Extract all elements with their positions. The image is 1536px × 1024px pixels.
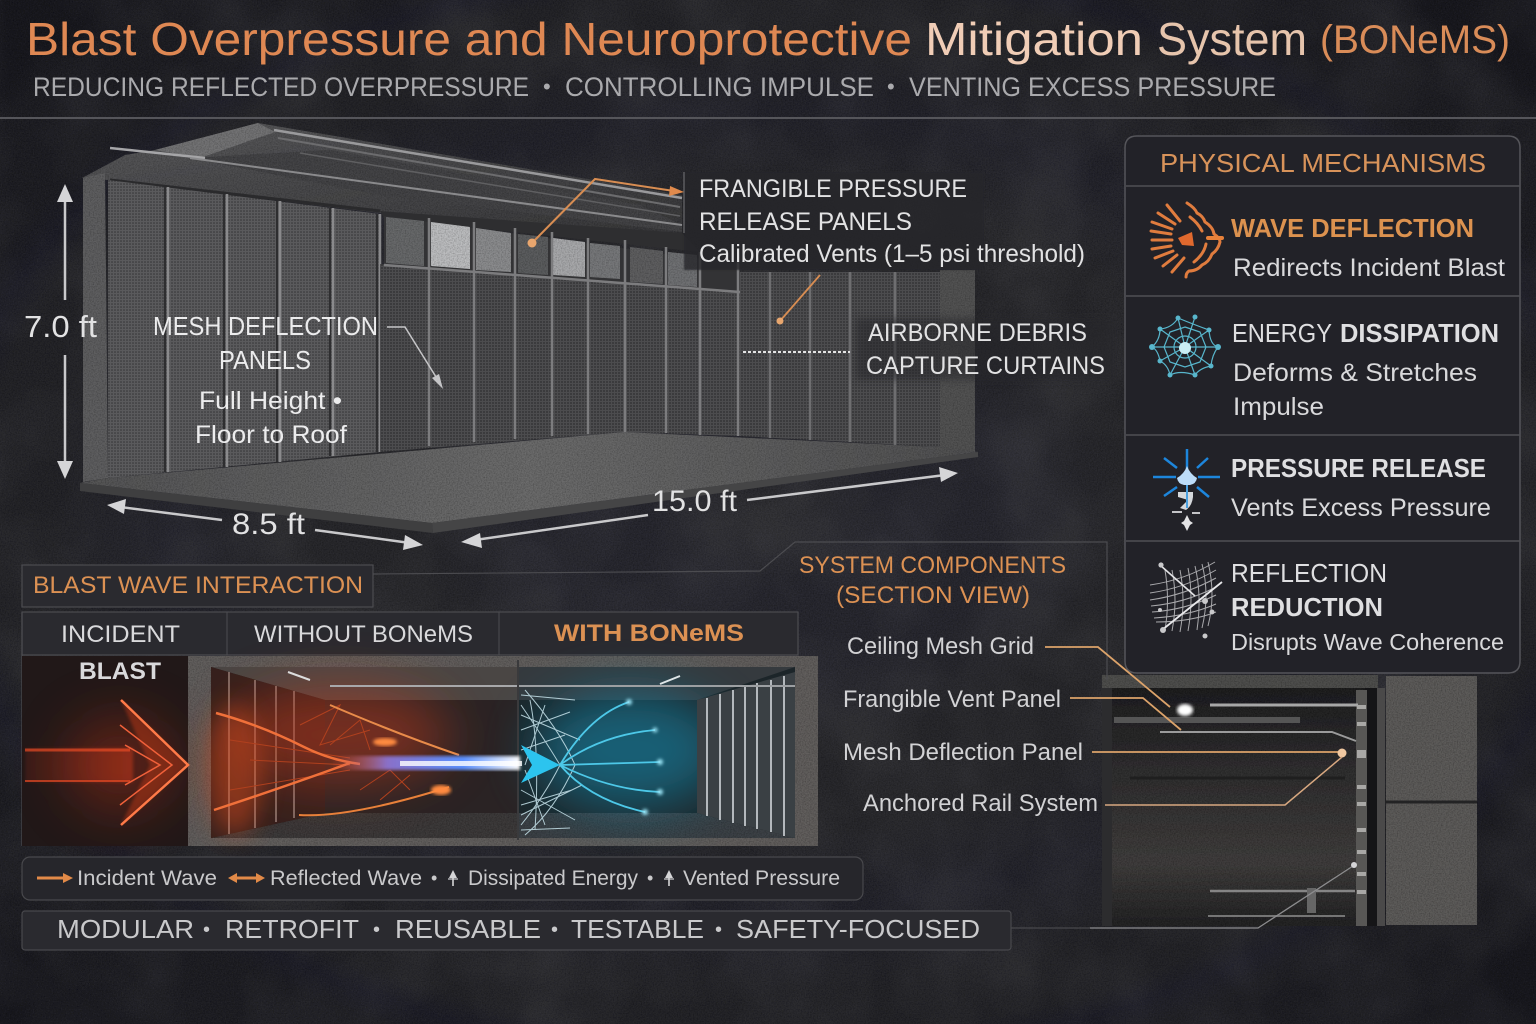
room: ceiling <box>82 123 700 252</box>
features strip: RETROFIT <box>225 914 359 944</box>
component labels and leaders <box>843 633 1346 817</box>
features strip <box>22 911 1011 950</box>
wave deflection text <box>1231 213 1505 282</box>
width dimension 8.5 ft <box>107 499 423 550</box>
features strip: • <box>373 919 380 941</box>
callout: mesh deflection panels: PANELS <box>219 345 311 375</box>
callout: frangible pressure release panels: Calibrated Vents (1–5 psi threshold) <box>699 240 1085 268</box>
incident blast column <box>22 656 188 846</box>
system components heading: SYSTEM COMPONENTS <box>799 552 1066 579</box>
incident blast column: BLAST <box>79 658 161 685</box>
features strip: REUSABLE <box>395 914 541 944</box>
icon: incident blast arrow <box>25 700 188 825</box>
legend: • <box>647 868 653 888</box>
features strip: • <box>203 919 210 941</box>
label: anchored rail system: Anchored Rail System <box>863 790 1098 817</box>
system components heading: (SECTION VIEW) <box>836 582 1030 609</box>
blast visual <box>188 656 818 846</box>
title <box>26 13 1510 65</box>
legend: Reflected Wave <box>270 867 422 890</box>
callout: airborne debris capture curtains <box>743 275 1105 380</box>
room with BONeMS <box>518 667 795 838</box>
features strip: SAFETY-FOCUSED <box>736 914 980 944</box>
icon: reflection reduction mesh <box>1150 562 1222 638</box>
subtitle: REDUCING REFLECTED OVERPRESSURE <box>33 72 529 102</box>
pressure release text: Vents Excess Pressure <box>1231 494 1491 522</box>
anchored rail <box>1356 690 1367 926</box>
room: floor slab <box>80 432 978 533</box>
title: (BONeMS) <box>1320 18 1510 62</box>
pressure release text: PRESSURE RELEASE <box>1231 453 1486 483</box>
features strip: MODULAR <box>57 914 194 944</box>
energy dissipation text: Impulse <box>1233 393 1324 421</box>
label: ceiling mesh grid: Ceiling Mesh Grid <box>847 633 1034 660</box>
subtitle: • <box>543 74 551 99</box>
concrete frame <box>188 656 818 846</box>
system components heading <box>799 552 1066 609</box>
pressure release text <box>1231 453 1491 522</box>
legend: Dissipated Energy <box>468 867 638 890</box>
callout: frangible pressure release panels: RELEASE PANELS <box>699 208 912 236</box>
panel: blast wave interaction <box>22 565 818 846</box>
room without BONeMS <box>207 667 518 838</box>
legend <box>22 857 863 900</box>
label: ceiling mesh grid <box>847 633 1170 707</box>
length dimension 15.0 ft <box>461 467 958 548</box>
heading: blast wave interaction: BLAST WAVE INTERACTION <box>33 572 363 599</box>
subtitle: • <box>887 74 895 99</box>
energy dissipation text: Deforms & Stretches <box>1233 359 1477 387</box>
features strip: • <box>551 919 558 941</box>
label: mesh deflection panel <box>843 739 1346 766</box>
heading: physical mechanisms: PHYSICAL MECHANISMS <box>1160 148 1486 178</box>
icon: reflected wave arrow <box>228 873 265 883</box>
table header: INCIDENT <box>61 621 180 648</box>
wave deflection text: Redirects Incident Blast <box>1233 254 1505 282</box>
concrete wall <box>1377 676 1477 926</box>
height dimension 7.0 ft: 7.0 ft <box>24 309 97 344</box>
callout: frangible pressure release panels: FRANGIBLE PRESSURE <box>699 175 967 203</box>
width dimension 8.5 ft: 8.5 ft <box>232 508 306 541</box>
horizontal rails <box>1114 705 1358 916</box>
reflection reduction text: REFLECTION <box>1231 558 1387 588</box>
panel: physical mechanisms <box>1125 136 1520 673</box>
energy dissipation text: ENERGY <box>1232 318 1332 348</box>
features strip: • <box>715 919 722 941</box>
icon: incident wave arrow <box>37 873 73 883</box>
legend: Incident Wave <box>77 867 217 890</box>
table header: WITHOUT BONeMS <box>254 621 473 648</box>
reflection reduction text <box>1231 558 1504 655</box>
room: corner post <box>83 173 108 482</box>
legend: Vented Pressure <box>683 867 840 890</box>
icon: pressure release <box>1153 449 1220 531</box>
legend: • <box>431 868 437 888</box>
reflection reduction text: REDUCTION <box>1231 592 1383 622</box>
wave deflection text: WAVE DEFLECTION <box>1231 213 1474 243</box>
callout: mesh deflection panels: Full Height • <box>199 387 342 415</box>
icon: energy dissipation web <box>1149 314 1221 378</box>
title: System <box>1157 13 1307 65</box>
label: frangible vent panel: Frangible Vent Panel <box>843 686 1061 713</box>
table header: WITH BONeMS <box>554 620 744 647</box>
icon: vented pressure <box>664 870 674 886</box>
height dimension 7.0 ft <box>24 184 97 479</box>
heading: blast wave interaction <box>22 565 373 607</box>
title: Mitigation <box>925 13 1143 65</box>
callout: mesh deflection panels <box>153 311 443 449</box>
room: back wall panels and windows <box>380 216 740 452</box>
callout: mesh deflection panels: Floor to Roof <box>195 421 347 449</box>
features strip: TESTABLE <box>571 914 704 944</box>
energy dissipation text <box>1232 318 1499 421</box>
reflection reduction text: Disrupts Wave Coherence <box>1231 629 1504 655</box>
label: mesh deflection panel: Mesh Deflection Panel <box>843 739 1083 766</box>
length dimension 15.0 ft: 15.0 ft <box>652 485 738 518</box>
subtitle <box>33 72 1276 102</box>
subtitle: VENTING EXCESS PRESSURE <box>909 72 1276 102</box>
room: left mesh panels <box>108 180 380 478</box>
room illustration <box>80 123 978 533</box>
subtitle: CONTROLLING IMPULSE <box>565 72 874 102</box>
title: Blast Overpressure and Neuroprotective <box>26 13 912 65</box>
callout: airborne debris capture curtains: AIRBORNE DEBRIS <box>868 319 1087 347</box>
label: anchored rail system <box>863 757 1342 817</box>
room: right wall panels <box>740 270 975 452</box>
label: frangible vent panel <box>843 686 1181 730</box>
icon: wave deflection <box>1151 203 1222 277</box>
energy dissipation text: DISSIPATION <box>1340 318 1499 348</box>
icon: central beam <box>330 745 560 783</box>
icon: dissipated energy <box>448 870 458 886</box>
callout: airborne debris capture curtains: CAPTURE CURTAINS <box>866 352 1105 380</box>
table header <box>22 612 798 655</box>
callout: mesh deflection panels: MESH DEFLECTION <box>153 311 378 341</box>
section view illustration <box>1011 675 1477 928</box>
callout: frangible pressure release panels <box>528 172 1085 268</box>
